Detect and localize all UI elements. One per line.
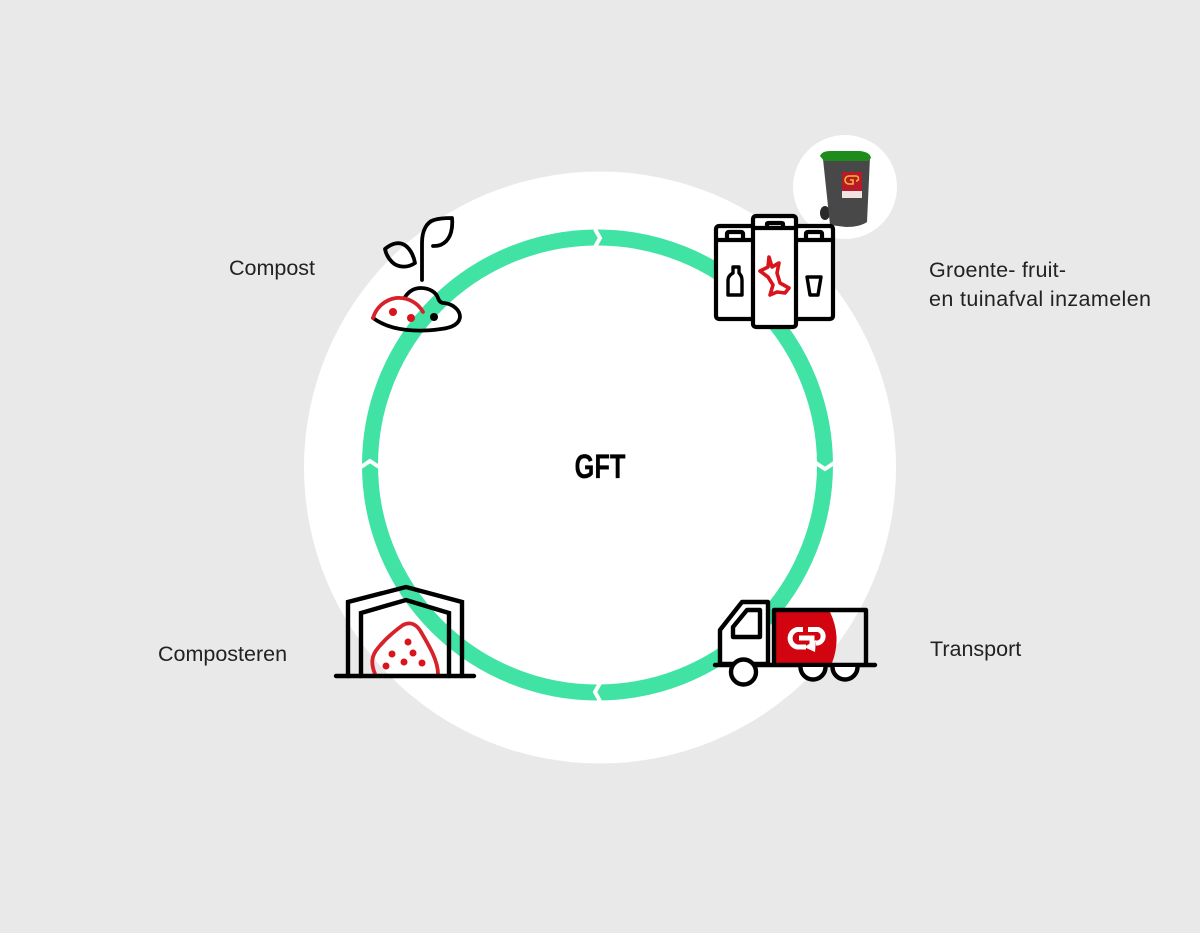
label: composting: Composteren	[158, 642, 287, 666]
label: collection: Groente- fruit-	[929, 258, 1066, 282]
icon: apple core	[760, 257, 789, 295]
white central disc	[304, 172, 896, 764]
icon: composting hall	[336, 587, 474, 676]
icon: bottle	[728, 267, 742, 295]
label: collection: en tuinafval inzamelen	[929, 287, 1151, 311]
center title: GFT	[574, 448, 626, 486]
green cycle ring with chevron arrows	[361, 229, 834, 701]
icon: compost plant	[373, 218, 460, 331]
icon: cup	[807, 277, 821, 295]
label: compost: Compost	[229, 256, 315, 280]
icon: truck	[715, 602, 875, 684]
icon: three collection bins	[716, 216, 833, 327]
icon: wheelie bin in white circle	[793, 135, 897, 239]
label: collection	[929, 258, 1151, 311]
logo: GP	[790, 630, 823, 652]
label: transport: Transport	[930, 637, 1021, 661]
